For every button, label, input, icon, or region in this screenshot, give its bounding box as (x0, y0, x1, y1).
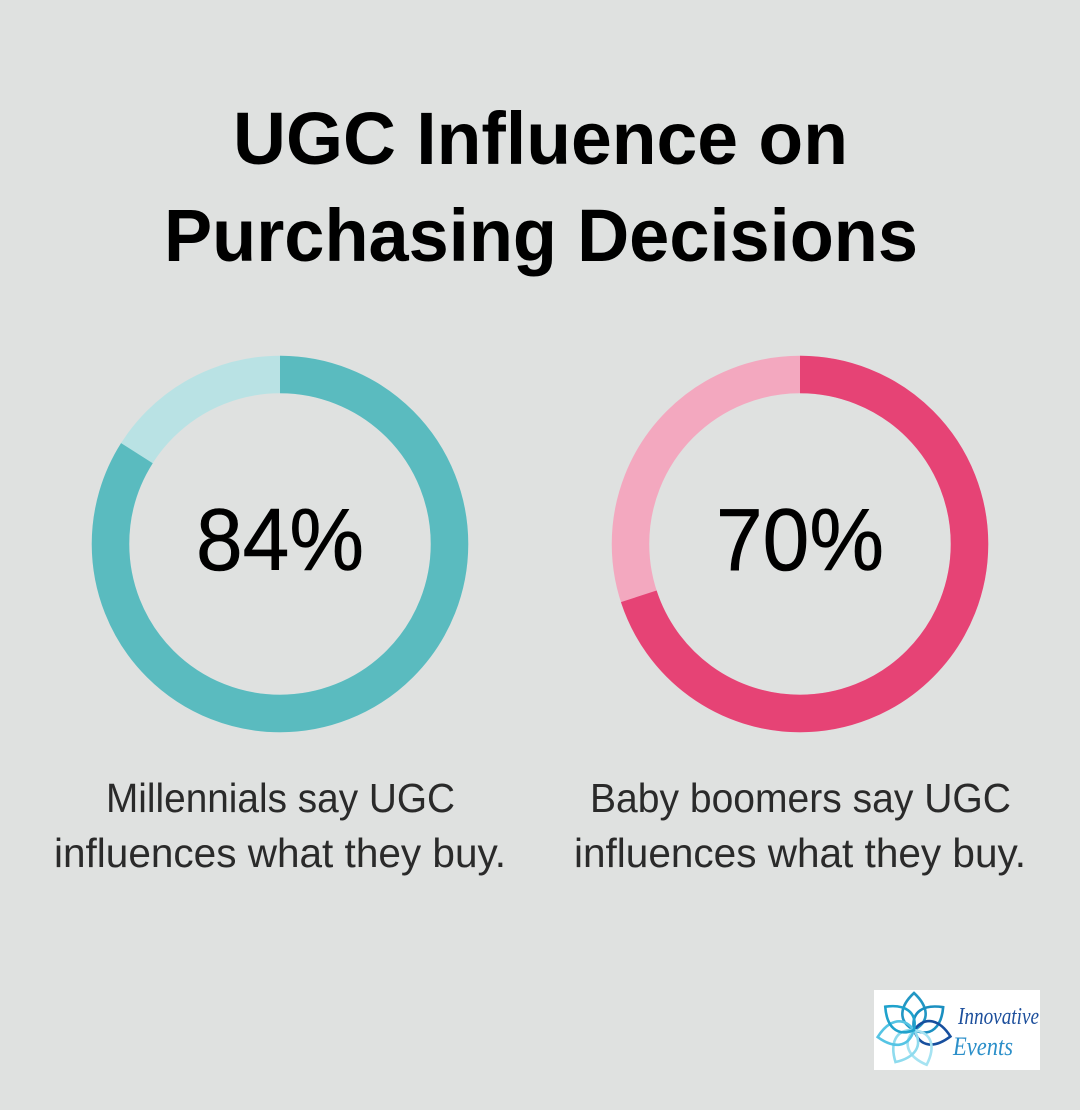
panel: millennials (54, 374, 506, 876)
description: millennials: influences what they buy. (54, 830, 506, 876)
title: Purchasing Decisions (164, 194, 918, 277)
logo wordmark: Innovative (957, 1004, 1039, 1030)
donut chart: 70% (630, 374, 970, 714)
description: baby boomers (574, 775, 1026, 876)
description: baby boomers: influences what they buy. (574, 830, 1026, 876)
title: UGC Influence on (233, 97, 848, 180)
logo wordmark: Events (952, 1032, 1013, 1061)
icon: flower (875, 993, 952, 1069)
logo: Innovative Events (874, 990, 1040, 1070)
description: millennials: Millennials say UGC (106, 775, 455, 821)
logo wordmark (952, 1004, 1039, 1061)
donut chart: 84% (110, 374, 450, 714)
panel: baby boomers (574, 374, 1026, 876)
description: baby boomers: Baby boomers say UGC (590, 775, 1011, 821)
stat: 84%: 84% (196, 490, 364, 589)
title (164, 97, 918, 277)
description: millennials (54, 775, 506, 876)
stat: 70%: 70% (716, 490, 884, 589)
